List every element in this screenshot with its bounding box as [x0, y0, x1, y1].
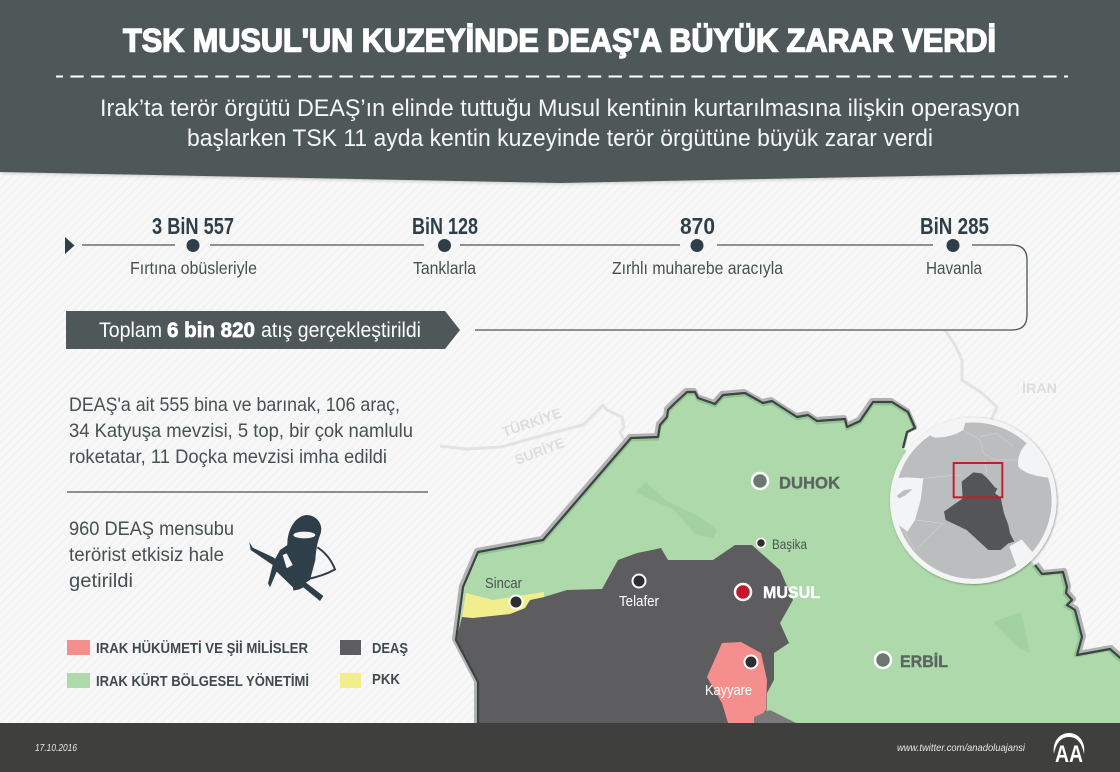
- item: Fırtına obüsleri: Fırtına obüsleriyle: [130, 258, 257, 278]
- city: Sincar: Sincar: [485, 575, 522, 592]
- legend: DEAŞ: [340, 640, 408, 657]
- item: Havan: [920, 213, 989, 278]
- country borders: [904, 430, 1017, 550]
- item: Zırhlı muharebe aracı: [612, 213, 783, 278]
- item: Fırtına obüsleri: [130, 213, 257, 278]
- boundary inner shade: [478, 394, 915, 554]
- region: Irak Kürt Bölgesel Yönetimi: [456, 392, 1120, 730]
- header panel: [0, 0, 1120, 183]
- city: Kayyare: Kayyare: [705, 682, 752, 699]
- icon: AA logo: AA: [1055, 741, 1083, 768]
- city: Telafer: [619, 574, 659, 610]
- text block: destroyed targets: roketatar, 11 Doçka mevzisi imha edildi: [69, 446, 387, 468]
- text block: neutralized: getirildi: [69, 570, 133, 592]
- city: Başika: [756, 536, 807, 552]
- locator globe: [890, 417, 1057, 584]
- city: Musul: MUSUL: [763, 583, 820, 602]
- total banner: atış gerçekleştirildi: [261, 319, 421, 342]
- text block: neutralized: terörist etkisiz hale: [69, 544, 224, 566]
- date: 17.10.2016: [35, 742, 77, 754]
- subtitle: Irak’ta terör örgütü DEAŞ’ın elinde tuttuğu Musul kentinin kurtarılmasına ilişkin operasyon: [100, 95, 1020, 122]
- region: DEAŞ: [456, 545, 793, 730]
- lake and terrain texture: [635, 482, 1030, 653]
- text block: destroyed targets: DEAŞ'a ait 555 bina ve barınak, 106 araç,: [69, 394, 400, 416]
- total banner: Toplam: [99, 319, 162, 342]
- label: SURİYE: SURİYE: [512, 434, 567, 468]
- region: Irak hükümeti ve Şii milisler: [707, 642, 767, 723]
- city: Erbil: [875, 652, 948, 671]
- title: TSK MUSUL'UN KUZEYİNDE DEAŞ'A BÜYÜK ZARAR VERDİ: [123, 22, 996, 58]
- city: Duhok: DUHOK: [779, 474, 841, 492]
- locator box: [954, 463, 1002, 497]
- item: Havan: BiN 285: [920, 213, 989, 239]
- label: İRAN: İRAN: [1022, 380, 1057, 396]
- text block: destroyed targets: [69, 394, 413, 468]
- city: Musul: [735, 583, 820, 602]
- text block: destroyed targets: 34 Katyuşa mevzisi, 5 top, bir çok namlulu: [69, 420, 413, 442]
- city: Duhok: [752, 473, 841, 492]
- seas: [892, 420, 1057, 567]
- item: Fırtına obüsleri: 3 BiN 557: [152, 213, 234, 239]
- legend: PKK: [340, 672, 400, 688]
- Iraq: [944, 472, 1014, 550]
- map: [440, 330, 1120, 730]
- item: Havan: Havanla: [926, 258, 982, 278]
- source: www.twitter.com/anadoluajansi: [897, 742, 1026, 754]
- timeline: [65, 213, 1027, 330]
- icon: masked fighter: [249, 515, 335, 601]
- subtitle: başlarken TSK 11 ayda kentin kuzeyinde terör örgütüne büyük zarar verdi: [187, 125, 933, 152]
- city: Sincar: [485, 575, 522, 608]
- boundary line: [456, 392, 915, 730]
- boundary halo: [455, 391, 914, 729]
- island: Cyprus: [897, 489, 913, 498]
- icon: AA logo: [1054, 733, 1084, 768]
- region: gray area: [754, 710, 796, 723]
- total banner: [66, 311, 460, 349]
- subtitle: [100, 95, 1020, 152]
- text block: neutralized: [69, 518, 234, 592]
- legend: [67, 640, 408, 690]
- footer: [0, 723, 1120, 772]
- item: Zırhlı muharebe aracı: 870: [680, 213, 715, 239]
- total banner: 6 bin 820: [167, 319, 255, 342]
- item: Zırhlı muharebe aracı: Zırhlı muharebe aracıyla: [612, 258, 783, 278]
- timeline arrow: [65, 237, 74, 254]
- city: Kayyare: [705, 656, 758, 699]
- text block: neutralized: 960 DEAŞ mensubu: [69, 518, 234, 540]
- city: Telafer: Telafer: [619, 593, 659, 610]
- item: Tanklar: Tanklarla: [413, 258, 476, 278]
- item: Tanklar: [412, 213, 478, 278]
- legend: Irak hükümeti ve Şii milisler: IRAK HÜKÜMETİ VE Şİİ MİLİSLER: [96, 640, 308, 657]
- label: TÜRKİYE: TÜRKİYE: [500, 405, 564, 440]
- legend: Irak Kürt Bölgesel Yönetimi: IRAK KÜRT BÖLGESEL YÖNETİMİ: [96, 673, 309, 690]
- legend: DEAŞ: DEAŞ: [372, 641, 408, 657]
- item: Tanklar: BiN 128: [412, 213, 478, 239]
- city: Başika: Başika: [772, 536, 807, 552]
- border lines: Türkiye-Suriye and İran: [440, 330, 997, 449]
- city: Erbil: ERBİL: [900, 652, 948, 671]
- legend: PKK: PKK: [372, 672, 400, 688]
- region: PKK: [462, 592, 544, 618]
